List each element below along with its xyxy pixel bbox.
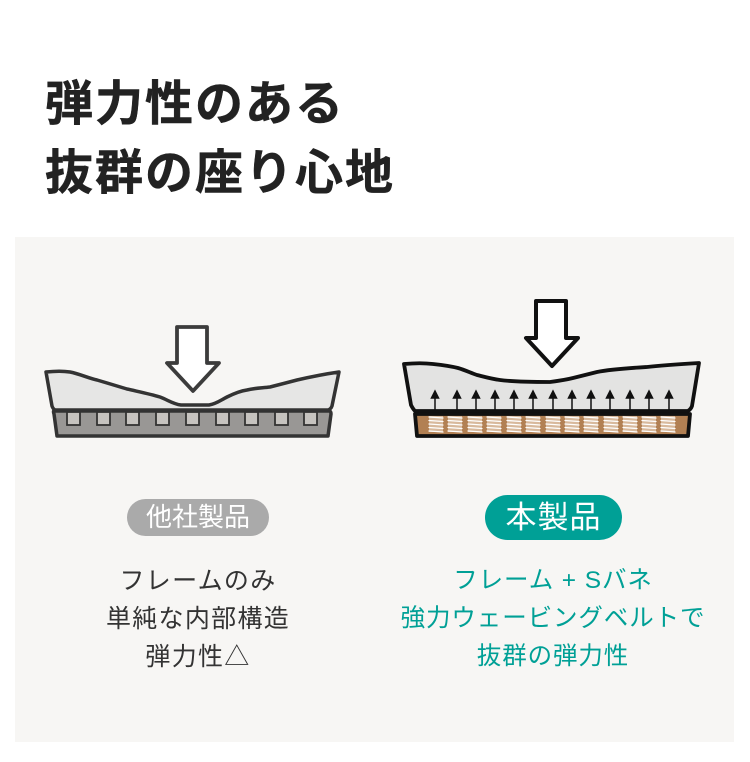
- text: this product description: 強力ウェービングベルトで: [401, 605, 705, 632]
- text: this product description: 抜群の弾力性: [477, 643, 629, 670]
- springs: [429, 416, 675, 432]
- text: other product description: [106, 567, 290, 671]
- arrow: pressing down: [167, 327, 219, 391]
- text: other product description: フレームのみ: [119, 567, 277, 595]
- rebound arrows: [432, 391, 672, 410]
- text: this product description: フレーム + Sバネ: [453, 567, 653, 594]
- webbing base: [415, 414, 690, 436]
- text: this product description: [401, 567, 705, 670]
- badge: this product: [485, 495, 622, 540]
- cushion slightly compressed: [404, 363, 699, 411]
- cushion compressed deeply: [46, 371, 339, 410]
- text: other product description: 単純な内部構造: [106, 605, 290, 633]
- text: other product description: 弾力性△: [145, 643, 251, 671]
- panel: comparison background: [15, 237, 734, 742]
- badge: other products: [127, 499, 269, 536]
- badge: this product: 本製品: [506, 500, 602, 535]
- title: [45, 78, 395, 200]
- title: 弾力性のある: [45, 78, 345, 131]
- badge: other products: 他社製品: [146, 502, 250, 532]
- title: 抜群の座り心地: [45, 147, 395, 200]
- arrow: pressing down: [526, 301, 578, 366]
- base frame with squares: [54, 411, 331, 436]
